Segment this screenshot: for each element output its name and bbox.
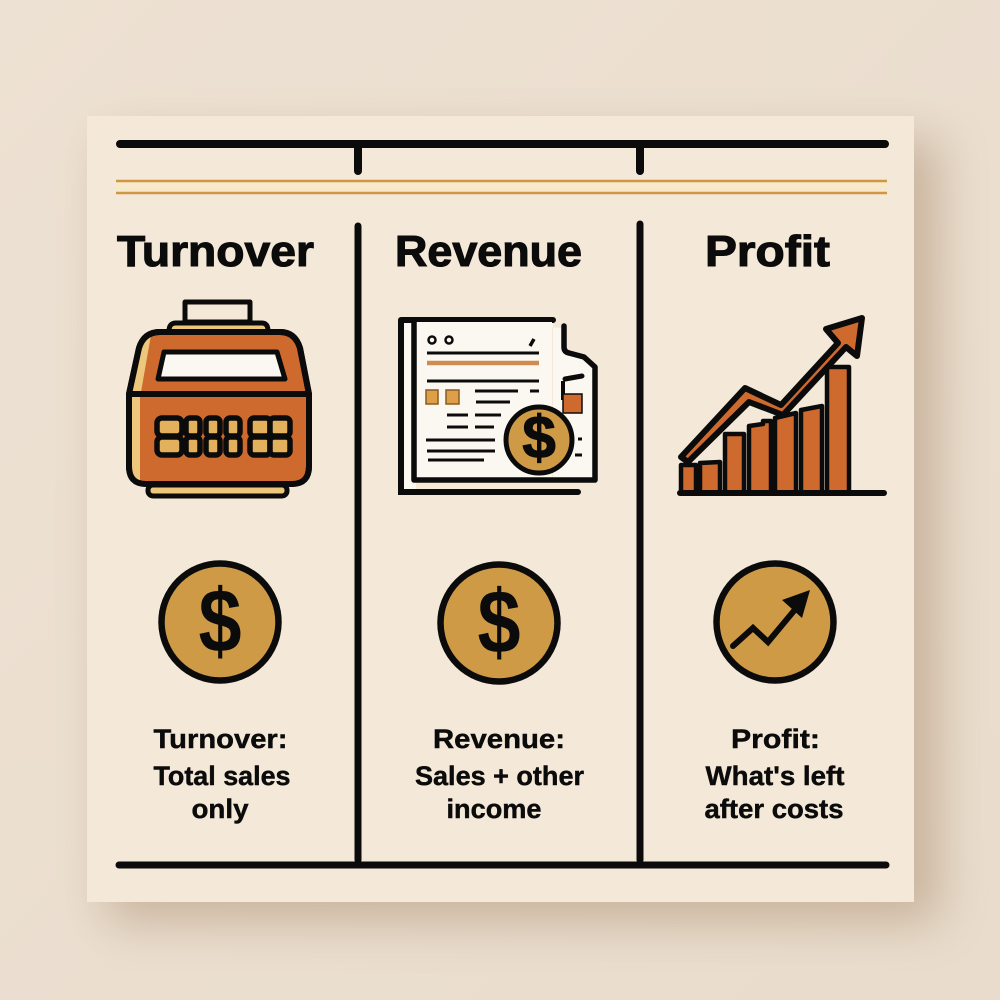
icon: turnover dollar coin: $ [198,571,242,671]
text: profit caption: What's left [706,761,845,791]
text: turnover caption: only [192,794,248,824]
text: revenue caption: Sales + other [415,761,584,791]
heading: Profit: Profit [705,227,830,276]
icon: invoice document with coin [401,320,596,492]
text: turnover caption: Turnover: [154,724,288,754]
text: revenue caption: income [446,794,542,824]
icon: revenue dollar coin [440,564,558,682]
text: revenue caption: Revenue: [433,724,565,754]
heading: Revenue: Revenue [395,227,582,276]
text: turnover caption: Total sales [154,761,290,791]
panel: card [87,116,914,902]
text: turnover caption [154,724,290,824]
coin dollar sign: $ [522,404,556,471]
icon: cash register [129,302,309,496]
text: revenue caption [415,724,584,824]
icon: profit trend coin [716,564,834,680]
text: profit caption: after costs [704,794,844,824]
heading: Turnover: Turnover [117,227,314,276]
icon: growth bar chart with arrow [680,318,884,493]
icon: revenue dollar coin: $ [477,572,521,672]
icon: turnover dollar coin [162,564,278,680]
text: profit caption: Profit: [731,724,820,754]
text: profit caption [704,724,845,824]
